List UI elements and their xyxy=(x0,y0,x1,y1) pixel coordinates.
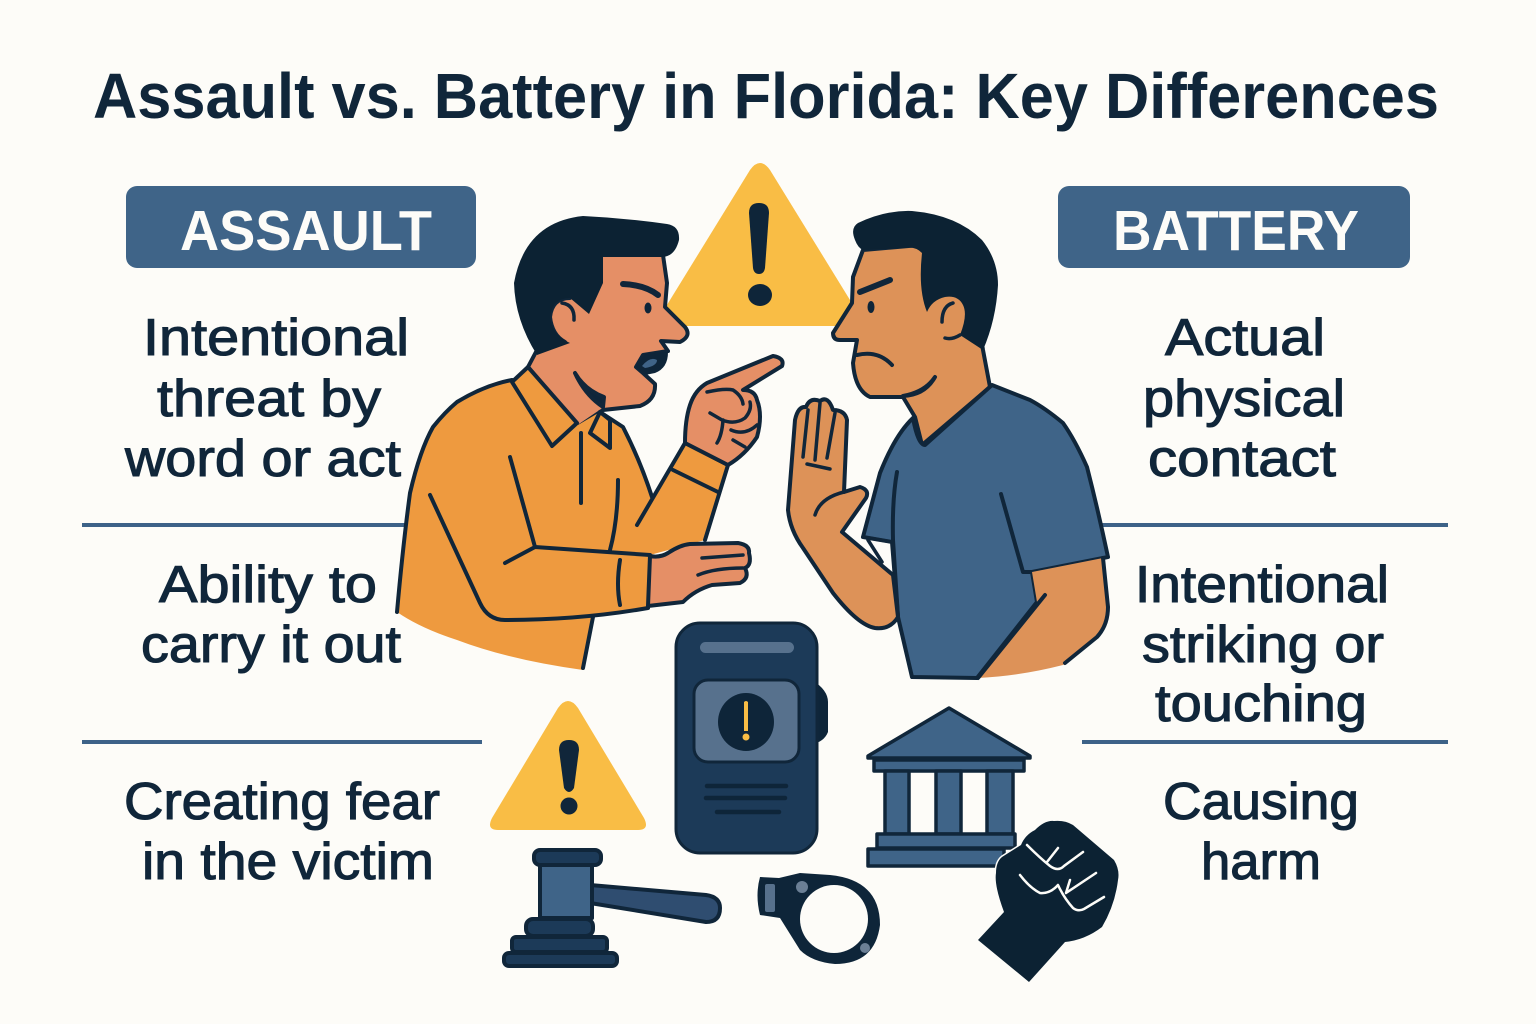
shirt folds xyxy=(893,472,1032,617)
battery point 1: Actual xyxy=(1165,309,1325,367)
neck and face xyxy=(833,245,990,445)
divider lines xyxy=(82,525,1448,742)
assault point 1: Intentional xyxy=(143,309,409,367)
assault heading badge: ASSAULT xyxy=(180,199,432,263)
jaw shadow xyxy=(903,377,935,396)
assault point 3: Creating fear xyxy=(124,773,440,831)
icon: fist xyxy=(978,821,1118,982)
battery point 1: physical xyxy=(1143,370,1345,428)
battery point 3: harm xyxy=(1201,833,1321,891)
assault point 3: in the victim xyxy=(142,833,434,891)
panel: battery column xyxy=(1058,186,1410,891)
face and neck xyxy=(528,255,688,427)
assault heading badge xyxy=(126,186,476,268)
brow and eye xyxy=(623,284,658,295)
lower hand xyxy=(648,543,750,606)
illustration: man in orange shirt xyxy=(397,216,783,670)
illustration: man in blue shirt xyxy=(788,211,1108,678)
icon: handcuff xyxy=(758,873,880,964)
battery heading badge xyxy=(1058,186,1410,268)
raised hand and forearm xyxy=(788,399,898,628)
title: Assault vs. Battery in Florida: Key Differences xyxy=(93,60,1439,132)
battery heading badge: BATTERY xyxy=(1113,199,1359,263)
battery point 2: striking or xyxy=(1142,616,1384,674)
blue shirt xyxy=(863,385,1108,678)
jaw shadow xyxy=(575,373,604,407)
assault point 1: threat by xyxy=(157,370,381,428)
icon: lower warning triangle xyxy=(490,701,646,830)
hair xyxy=(514,216,679,355)
ear detail xyxy=(562,303,574,320)
pointing hand xyxy=(685,356,783,465)
panel: assault column xyxy=(124,186,476,891)
collar xyxy=(512,367,610,448)
hair xyxy=(853,211,998,350)
battery point 1: contact xyxy=(1148,430,1337,488)
icon: gavel xyxy=(504,850,720,966)
ear xyxy=(942,303,960,339)
upper arm xyxy=(978,558,1108,678)
assault point 1: word or act xyxy=(124,430,402,488)
shirt outline and folds xyxy=(397,380,728,668)
assault point 2: Ability to xyxy=(159,556,377,614)
battery point 2: Intentional xyxy=(1135,556,1389,614)
orange shirt xyxy=(397,367,728,670)
icon: top warning triangle xyxy=(654,163,866,326)
open mouth xyxy=(636,352,668,375)
assault point 2: carry it out xyxy=(141,616,402,674)
brow, eye and mouth xyxy=(860,280,890,292)
icon: body camera xyxy=(676,623,828,853)
battery point 3: Causing xyxy=(1163,773,1359,831)
battery point 2: touching xyxy=(1155,675,1367,733)
icon: courthouse xyxy=(868,708,1030,866)
